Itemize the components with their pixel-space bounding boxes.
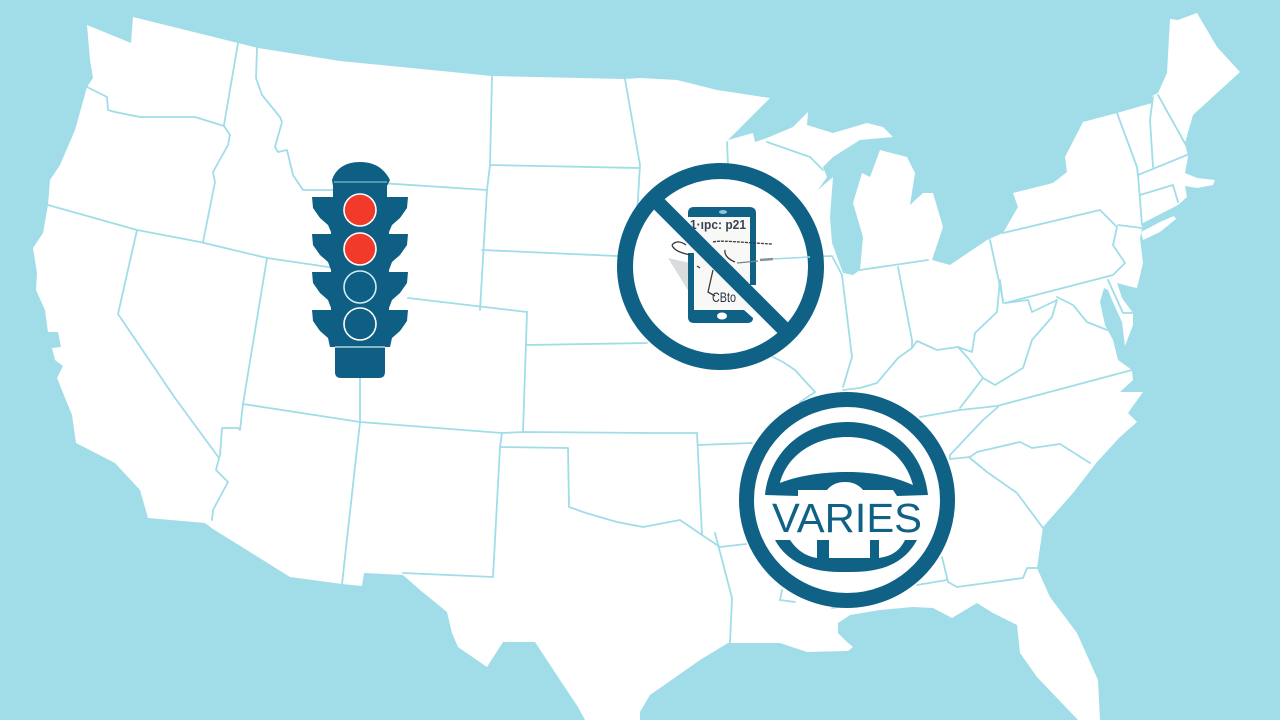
crumpled note behind phone xyxy=(668,258,702,300)
garbled screen text bottom: CBto xyxy=(712,289,736,305)
icon: traffic light with two red lights xyxy=(312,162,408,378)
phone home button xyxy=(717,312,727,320)
VARIES label: VARIES xyxy=(772,495,922,541)
phone body xyxy=(688,207,756,323)
dome seam xyxy=(334,181,387,183)
unlit light 3 xyxy=(344,271,376,303)
icon: no phone prohibition sign xyxy=(625,171,816,362)
base seam xyxy=(335,346,385,348)
state borders xyxy=(48,43,1187,643)
red light 2 xyxy=(344,233,376,265)
prohibition slash xyxy=(657,202,783,328)
garbled screen text top: 1·ıpc: p21 xyxy=(690,217,746,232)
icon: steering wheel labelled VARIES xyxy=(746,400,948,600)
upper wheel rim and hub xyxy=(765,422,928,496)
sign ring xyxy=(625,171,816,362)
outer ring xyxy=(746,400,948,600)
red light 1 xyxy=(344,194,376,226)
phone screen xyxy=(690,217,751,310)
scribbles xyxy=(672,241,773,296)
faint border crossing the sign xyxy=(772,257,810,259)
lower wheel rim and spokes xyxy=(775,540,917,572)
unlit light 4 xyxy=(344,308,376,340)
traffic light housing xyxy=(312,162,408,378)
phone speaker xyxy=(719,210,727,214)
